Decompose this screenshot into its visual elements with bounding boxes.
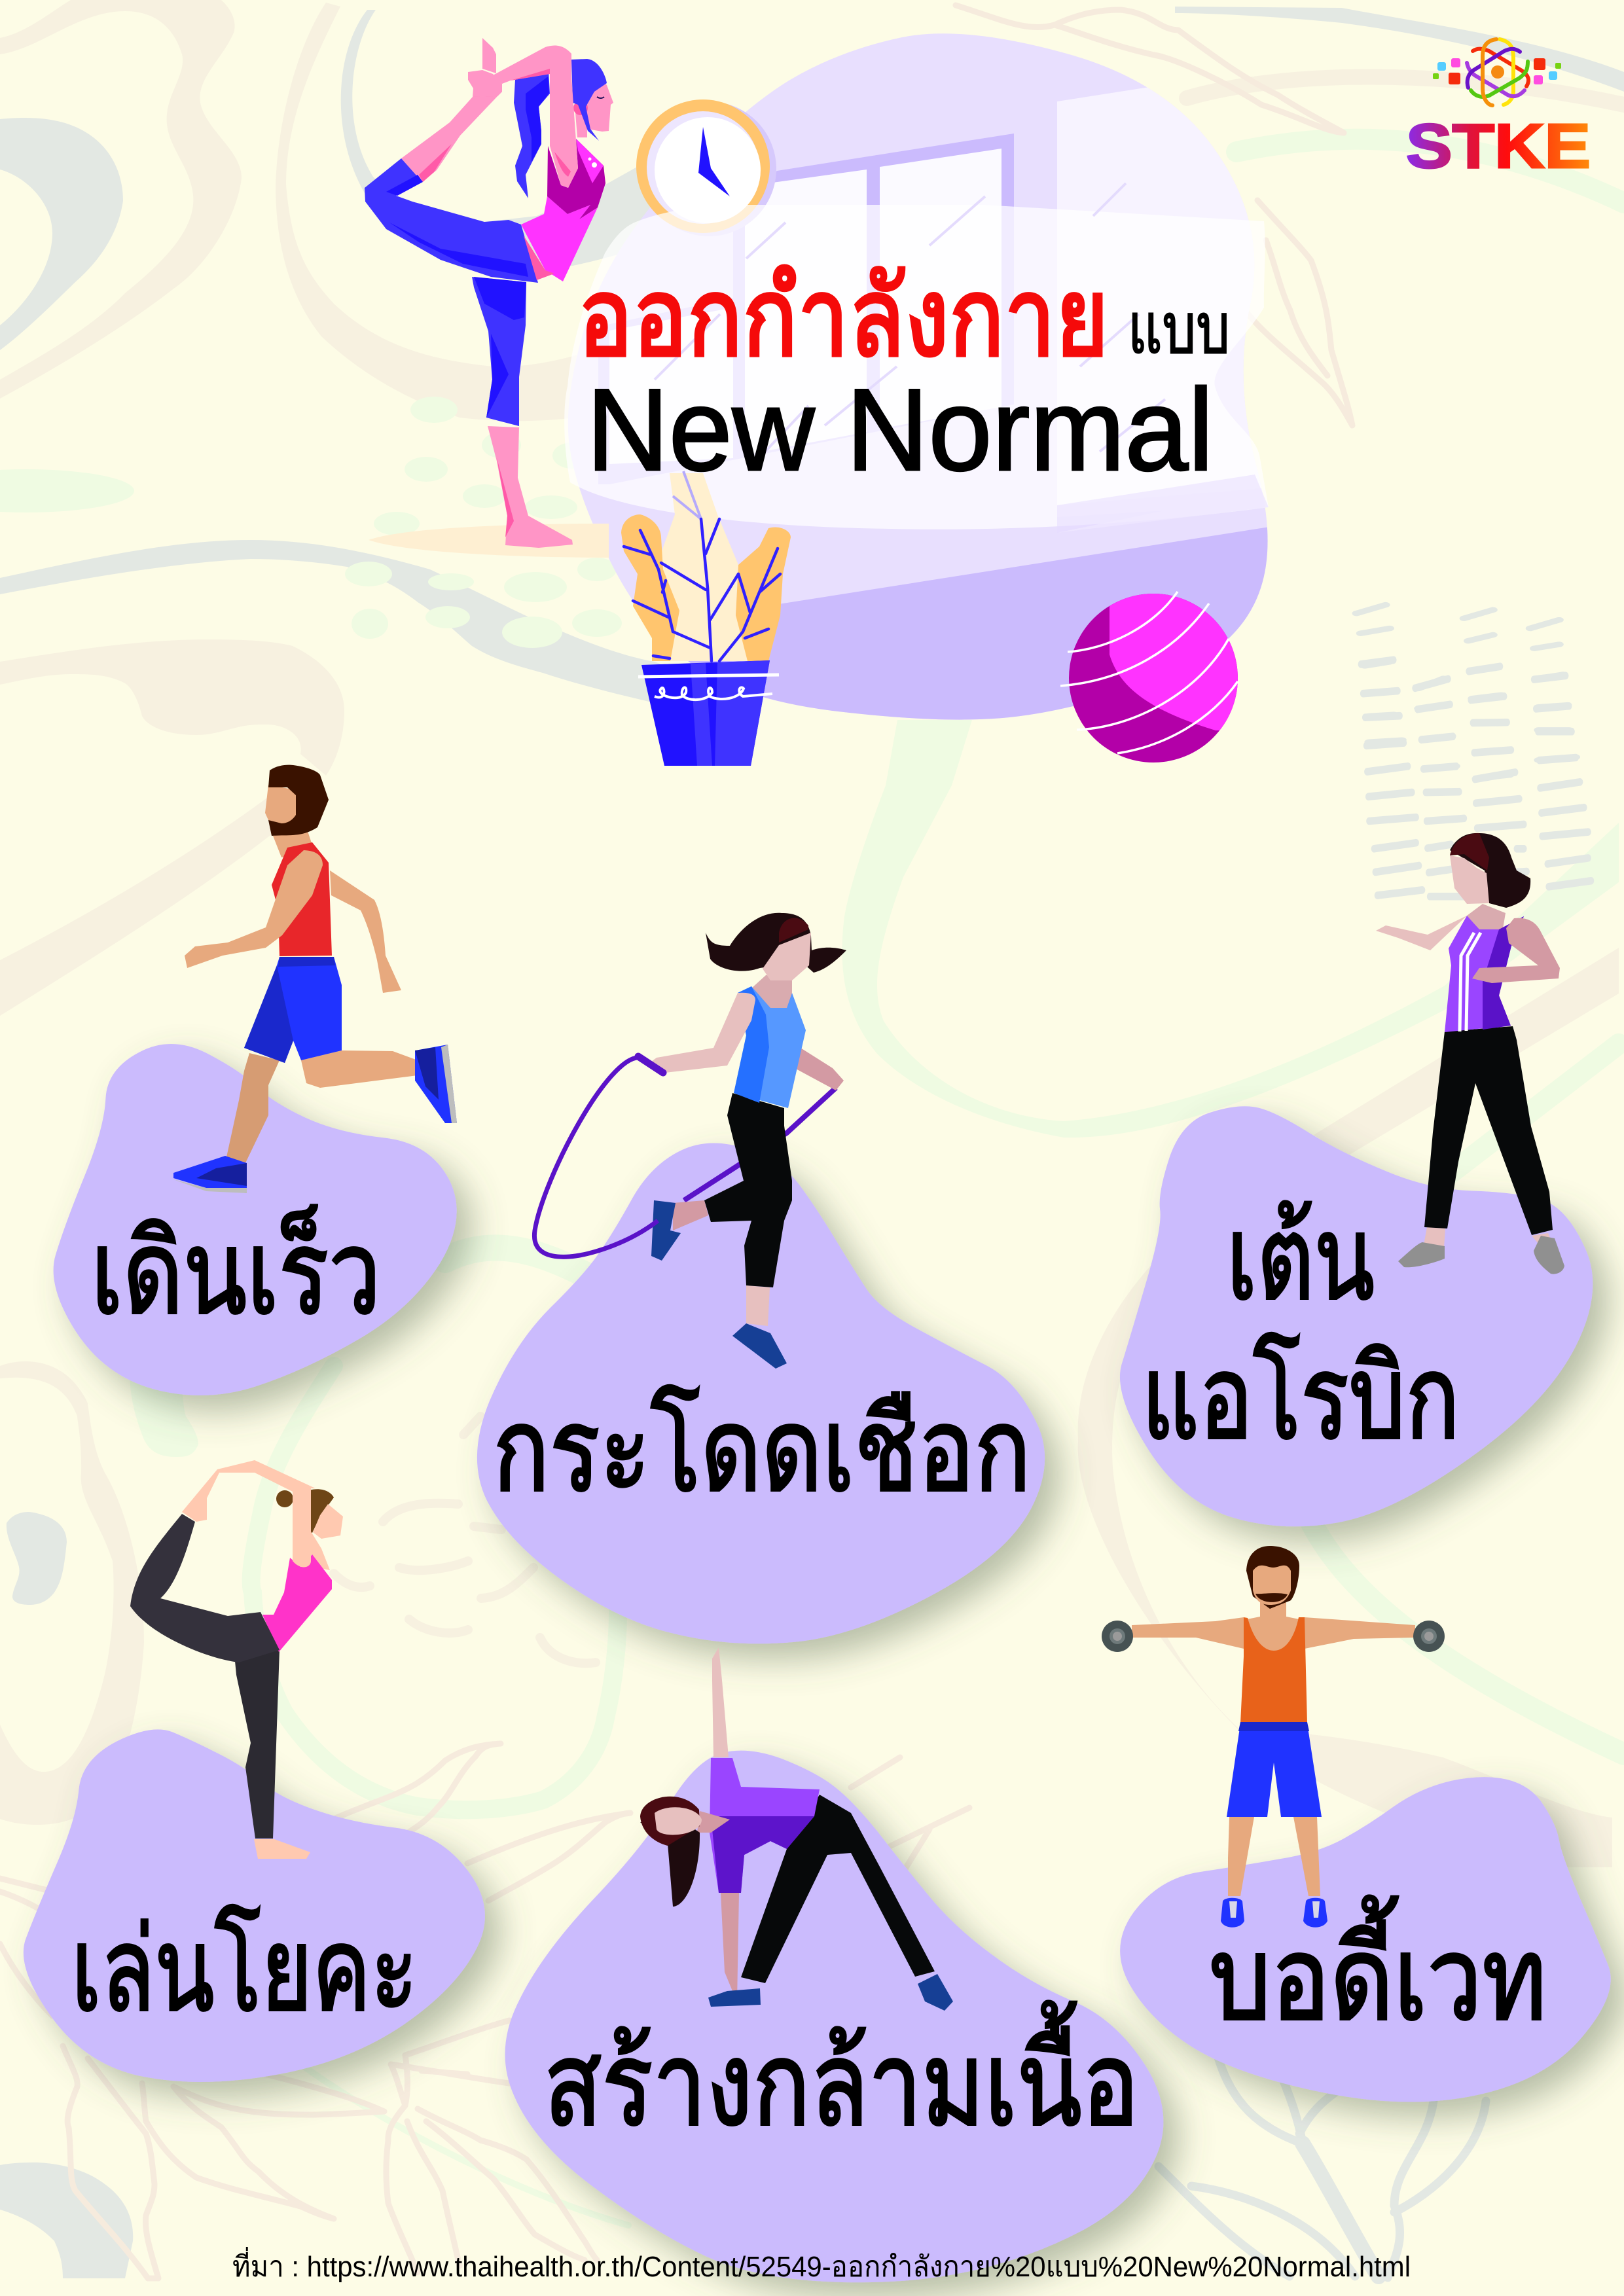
figure: hero yoga woman	[365, 38, 613, 548]
figure: dumbbell man	[1102, 1546, 1445, 1928]
right wall panel	[1057, 88, 1250, 437]
hair	[571, 59, 607, 141]
label: yoga: เล่นโยคะ	[71, 1905, 418, 2035]
title line 1 red: ออกกำลังกาย	[578, 256, 1109, 379]
logo wordmark: STKE	[1406, 111, 1591, 181]
floor shadow	[369, 524, 609, 558]
window panes	[609, 149, 1001, 464]
room back wall	[579, 33, 1267, 603]
translucent white wall layer	[564, 205, 1269, 529]
panel: jump rope blob	[477, 1143, 1045, 1643]
torso	[521, 196, 598, 281]
arm	[493, 45, 578, 188]
logo	[1406, 39, 1591, 181]
title line 2: New Normal	[586, 365, 1214, 495]
label: jump rope: กระโดดเชือก	[493, 1385, 1031, 1515]
window frame	[598, 134, 1014, 484]
panel: muscle blob	[505, 1751, 1163, 2282]
raised shin	[401, 96, 497, 182]
floor	[689, 528, 1267, 720]
floor light strip	[1057, 475, 1269, 533]
figure: aerobics woman	[1376, 833, 1564, 1274]
label: aerobics line 1: เต้น	[1227, 1193, 1375, 1323]
label: bodyweight: บอดี้เวท	[1209, 1895, 1547, 2044]
source credit: ที่มา : https://www.thaihealth.or.th/Content/52549-ออกกำลังกาย%20แบบ%20New%20Normal.html	[232, 2246, 1411, 2283]
figure: runner	[173, 765, 457, 1193]
toes	[482, 38, 496, 73]
figure: jump rope woman	[534, 913, 846, 1369]
panel: aerobics blob	[1120, 1106, 1593, 1526]
figure: yoga woman	[130, 1460, 343, 1859]
label: muscle building: สร้างกล้ามเนื้อ	[544, 2001, 1139, 2149]
icon: exercise ball	[1060, 586, 1244, 762]
title	[578, 256, 1230, 495]
ponytail	[514, 70, 550, 198]
label: aerobics line 2: แอโรบิก	[1142, 1333, 1460, 1463]
icon: potted plant	[621, 471, 791, 766]
panel: yoga blob	[24, 1729, 485, 2082]
title word black: แบบ	[1128, 289, 1230, 368]
panel: hero room	[579, 33, 1268, 720]
raised thigh	[365, 158, 538, 283]
label: walking: เดินเร็ว	[91, 1204, 381, 1338]
standing thigh	[472, 277, 526, 426]
standing calf	[488, 426, 573, 548]
window glints	[655, 183, 1165, 465]
figure: side bend woman	[640, 1647, 953, 2011]
face	[575, 79, 613, 137]
icon: wall clock	[636, 99, 776, 236]
logo symbol	[1467, 39, 1528, 105]
panel: walking blob	[54, 1044, 457, 1395]
panel: bodyweight blob	[1120, 1777, 1611, 2102]
